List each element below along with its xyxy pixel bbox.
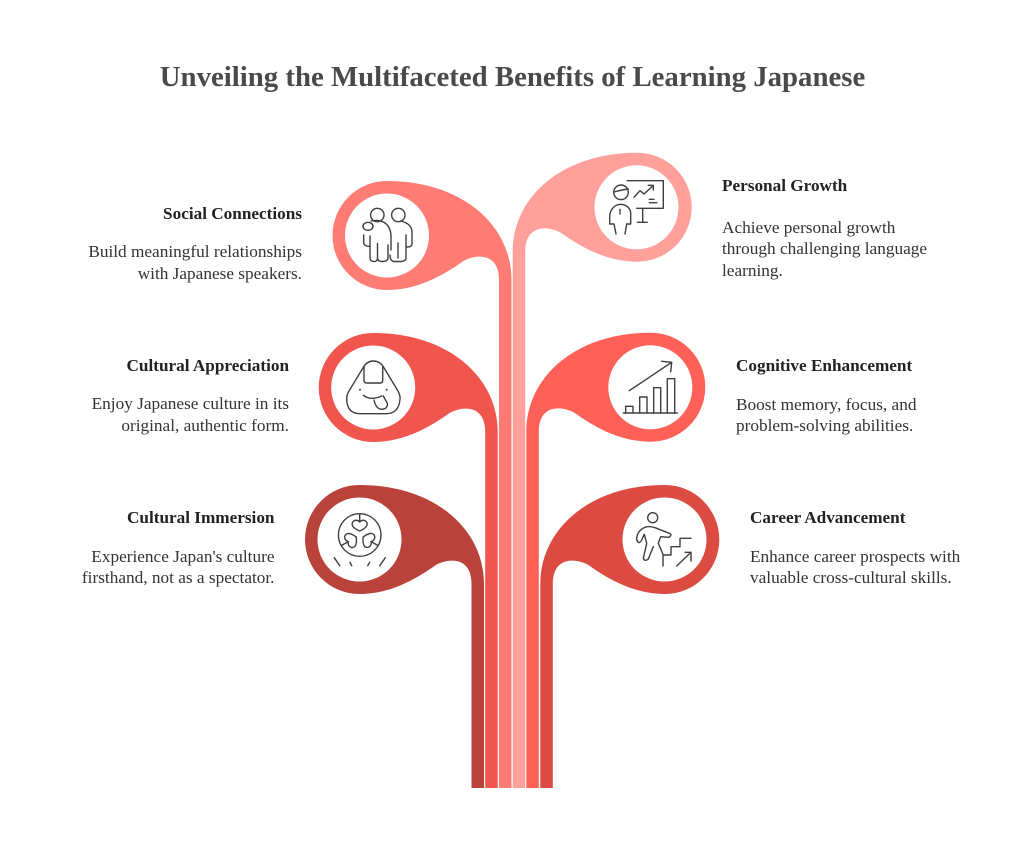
text: Career Advancement [750,508,961,587]
text: Personal Growth [722,176,927,280]
text: Cultural Appreciation: Enjoy Japanese culture in its [92,394,289,413]
icon: hearts in circle [334,514,385,566]
text: Cultural Appreciation: Cultural Appreciation [126,356,289,375]
icon: rising bars with arrow [623,361,677,413]
icon: presenter with chart [610,181,663,234]
text: Cognitive Enhancement: Cognitive Enhancement [736,356,912,375]
text: Cultural Appreciation [92,356,289,435]
text: Social Connections: Social Connections [163,204,302,223]
branch: Cultural Immersion [305,485,484,788]
text: Personal Growth: learning. [722,261,783,280]
text: Career Advancement: valuable cross-cultural skills. [750,568,952,587]
branch: Personal Growth [513,153,692,788]
text: Cultural Immersion: Experience Japan's culture [91,547,275,566]
text: Personal Growth: through challenging language [722,239,927,258]
text: Career Advancement: Career Advancement [750,508,906,527]
text: Career Advancement: Enhance career prospects with [750,547,961,566]
text: Cultural Appreciation: original, authentic form. [121,416,289,435]
text: Cognitive Enhancement: Boost memory, focus, and [736,395,917,414]
icon: person climbing stairs [637,513,691,566]
text: Personal Growth: Personal Growth [722,176,848,195]
branch: Social Connections [332,181,512,788]
text: Social Connections: Build meaningful relationships [88,242,302,261]
text: Cognitive Enhancement [736,356,917,435]
text: Cultural Immersion [82,508,275,587]
branch: Cognitive Enhancement [526,333,705,788]
text: Cognitive Enhancement: problem-solving abilities. [736,416,913,435]
branch: Cultural Appreciation [319,333,498,788]
icon: two people [363,208,412,262]
text: Personal Growth: Achieve personal growth [722,218,896,237]
icon: onigiri face [347,361,400,414]
text: Cultural Immersion: firsthand, not as a spectator. [82,568,274,587]
text: Social Connections [88,204,302,283]
branch: Career Advancement [540,485,719,788]
title: Unveiling the Multifaceted Benefits of Learning Japanese [160,61,865,93]
text: Social Connections: with Japanese speakers. [138,264,302,283]
text: Cultural Immersion: Cultural Immersion [127,508,275,527]
